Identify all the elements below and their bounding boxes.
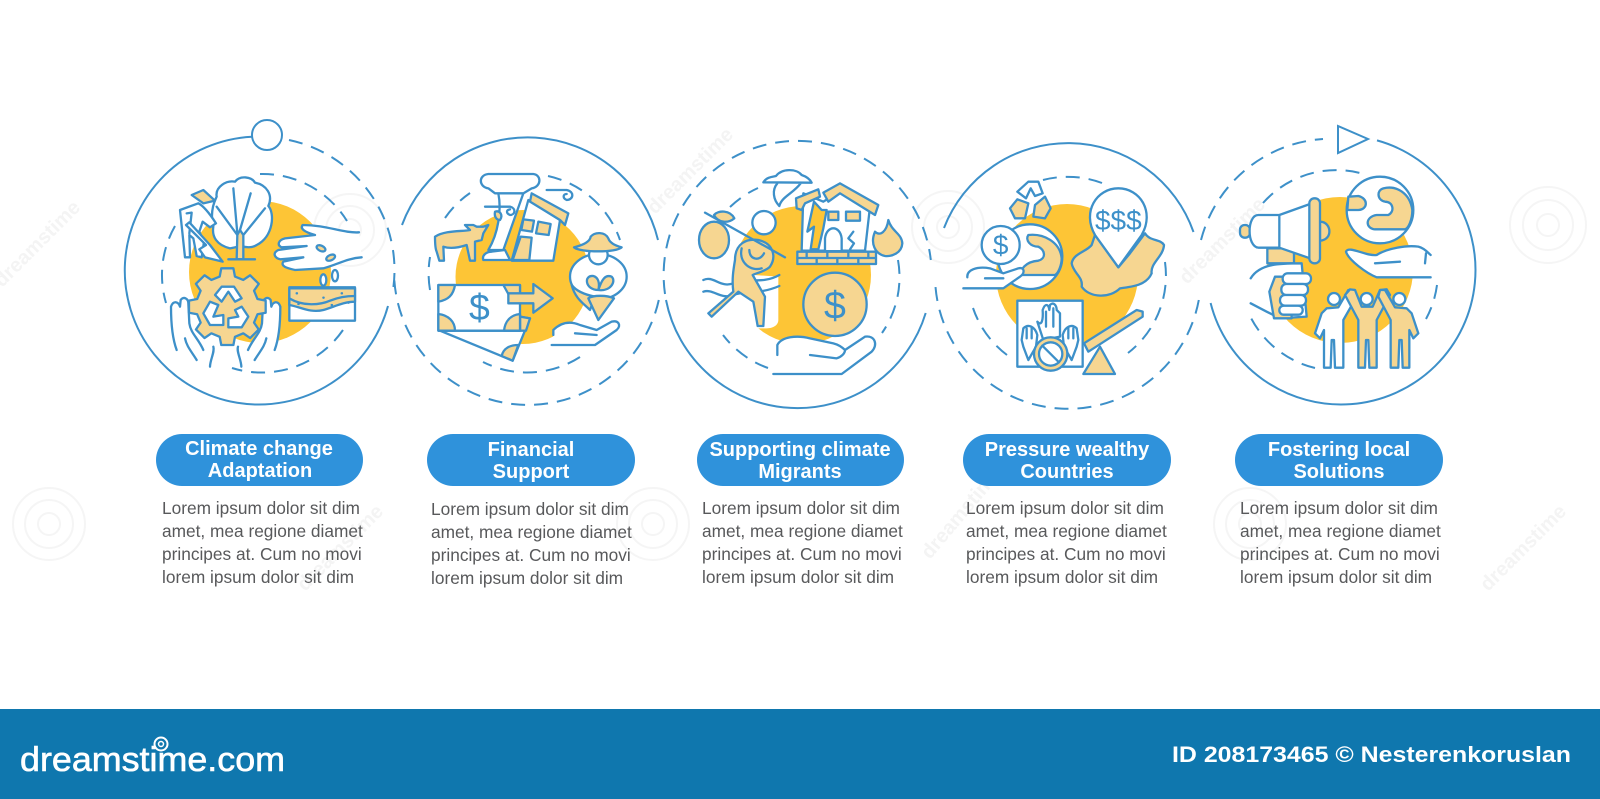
yellow background circle <box>996 204 1138 346</box>
icon: open hand <box>773 336 875 374</box>
label: financial support <box>427 434 635 486</box>
text block: fostering local solutions: Lorem ipsum dolor sit dim <box>1240 498 1438 518</box>
label: pressure wealthy countries: Countries <box>1020 461 1114 483</box>
label: supporting climate migrants: Migrants <box>758 461 842 483</box>
icon: tornado <box>481 174 572 260</box>
panel: supporting climate migrants circle <box>664 141 931 408</box>
watermarks: dreamstime <box>293 501 388 596</box>
panel: climate change adaptation circle <box>125 120 394 405</box>
watermarks: dreamstime <box>917 463 1006 563</box>
icon: flame <box>873 220 902 256</box>
icon: globe <box>998 224 1062 289</box>
icon: hand holding coin: $ <box>993 230 1009 261</box>
icon: migrant with bundle <box>699 211 785 328</box>
watermarks: dreamstime <box>643 124 738 219</box>
label: supporting climate migrants: Supporting climate <box>709 439 891 461</box>
watermarks: dreamstime <box>1175 194 1270 289</box>
icon: cracked house <box>796 183 878 264</box>
outer ring with end arrow <box>1201 126 1475 404</box>
text block: fostering local solutions: principes at. Cum no movi <box>1240 544 1440 564</box>
icon: megaphone <box>1240 198 1329 263</box>
icon: farmer holding plant <box>570 233 627 320</box>
text block: fostering local solutions: lorem ipsum dolor sit dim <box>1240 567 1432 587</box>
icon: cow <box>435 225 488 261</box>
watermarks <box>0 124 1586 596</box>
icon: map stain and price pin: $$$ <box>1095 205 1142 236</box>
icon: globe <box>1347 177 1413 243</box>
icon: hand gripping megaphone <box>1251 263 1311 318</box>
text block: financial support: Lorem ipsum dolor sit dim <box>431 499 629 519</box>
icon: soil layers <box>289 287 355 321</box>
icon: hand holding coin <box>963 226 1024 288</box>
icon: dollar coin: $ <box>824 283 846 327</box>
icon: banknotes with arrow <box>438 284 553 361</box>
panel: pressure wealthy countries circle <box>936 143 1199 409</box>
icon: blocked raised hands on scale <box>1017 301 1143 374</box>
panel: financial support circle <box>394 137 659 405</box>
logo: dreamstime.com: dreamstime.com <box>20 741 285 779</box>
inner dashed ring <box>162 174 347 373</box>
outer ring <box>664 141 931 408</box>
icon: open hand <box>1346 246 1431 277</box>
icon: storm cloud <box>763 170 812 206</box>
icon: tree <box>212 177 272 259</box>
watermarks: dreamstime <box>1476 501 1571 596</box>
icon: hand sowing seeds <box>275 225 362 286</box>
text block: supporting climate migrants: Lorem ipsum dolor sit dim <box>702 498 900 518</box>
icon: recycling symbol <box>1010 182 1051 218</box>
label: climate change adaptation: Adaptation <box>208 460 312 482</box>
text block: climate change adaptation: lorem ipsum dolor sit dim <box>162 567 354 587</box>
label: fostering local solutions <box>1235 434 1443 486</box>
label: financial support: Financial <box>488 439 574 461</box>
text block: climate change adaptation: amet, mea regione diamet <box>162 521 363 541</box>
image id and author credit: ID 208173465 © Nesterenkoruslan <box>1172 742 1571 767</box>
label: supporting climate migrants <box>697 434 904 486</box>
label: pressure wealthy countries <box>963 434 1171 486</box>
icon: dollar coin <box>803 273 867 336</box>
label: climate change adaptation <box>156 434 363 486</box>
label: climate change adaptation: Climate change <box>185 438 333 460</box>
text block: pressure wealthy countries: amet, mea regione diamet <box>966 521 1167 541</box>
icon: tilted house <box>512 193 568 261</box>
text block: pressure wealthy countries: principes at. Cum no movi <box>966 544 1166 564</box>
label: financial support: Support <box>493 461 570 483</box>
text block: climate change adaptation: Lorem ipsum dolor sit dim <box>162 498 360 518</box>
yellow background circle <box>1267 197 1413 343</box>
label: fostering local solutions: Fostering local <box>1268 439 1410 461</box>
inner dashed ring <box>973 177 1166 355</box>
label: pressure wealthy countries: Pressure wealthy <box>985 439 1150 461</box>
label: fostering local solutions: Solutions <box>1293 461 1385 483</box>
panel: fostering local solutions circle <box>1201 126 1475 404</box>
outer ring <box>936 143 1199 409</box>
icon: farmer with shovel <box>180 190 223 262</box>
yellow background circle <box>456 210 590 344</box>
text block: supporting climate migrants: amet, mea regione diamet <box>702 521 903 541</box>
icon: recycling gear in hands <box>171 268 280 367</box>
text block: supporting climate migrants: principes at. Cum no movi <box>702 544 902 564</box>
footer bar <box>0 709 1600 799</box>
text block: pressure wealthy countries: lorem ipsum dolor sit dim <box>966 567 1158 587</box>
icon: map stain and price pin <box>1072 188 1164 296</box>
yellow background circle <box>189 201 331 343</box>
inner dashed ring <box>1251 170 1437 368</box>
inner dashed ring <box>429 176 620 372</box>
text block: pressure wealthy countries: Lorem ipsum dolor sit dim <box>966 498 1164 518</box>
text block: financial support: principes at. Cum no movi <box>431 545 631 565</box>
text block: supporting climate migrants: lorem ipsum dolor sit dim <box>702 567 894 587</box>
icon: three people raising hands <box>1315 289 1418 368</box>
outer ring with start marker <box>125 120 394 405</box>
yellow background circle <box>733 206 871 344</box>
icon: banknotes with arrow: $ <box>469 286 490 328</box>
text block: fostering local solutions: amet, mea regione diamet <box>1240 521 1441 541</box>
outer ring <box>394 137 659 405</box>
inner dashed ring <box>723 188 900 368</box>
text block: financial support: lorem ipsum dolor sit dim <box>431 568 623 588</box>
icon: open hand <box>552 321 619 345</box>
text block: financial support: amet, mea regione diamet <box>431 522 632 542</box>
text block: climate change adaptation: principes at. Cum no movi <box>162 544 362 564</box>
